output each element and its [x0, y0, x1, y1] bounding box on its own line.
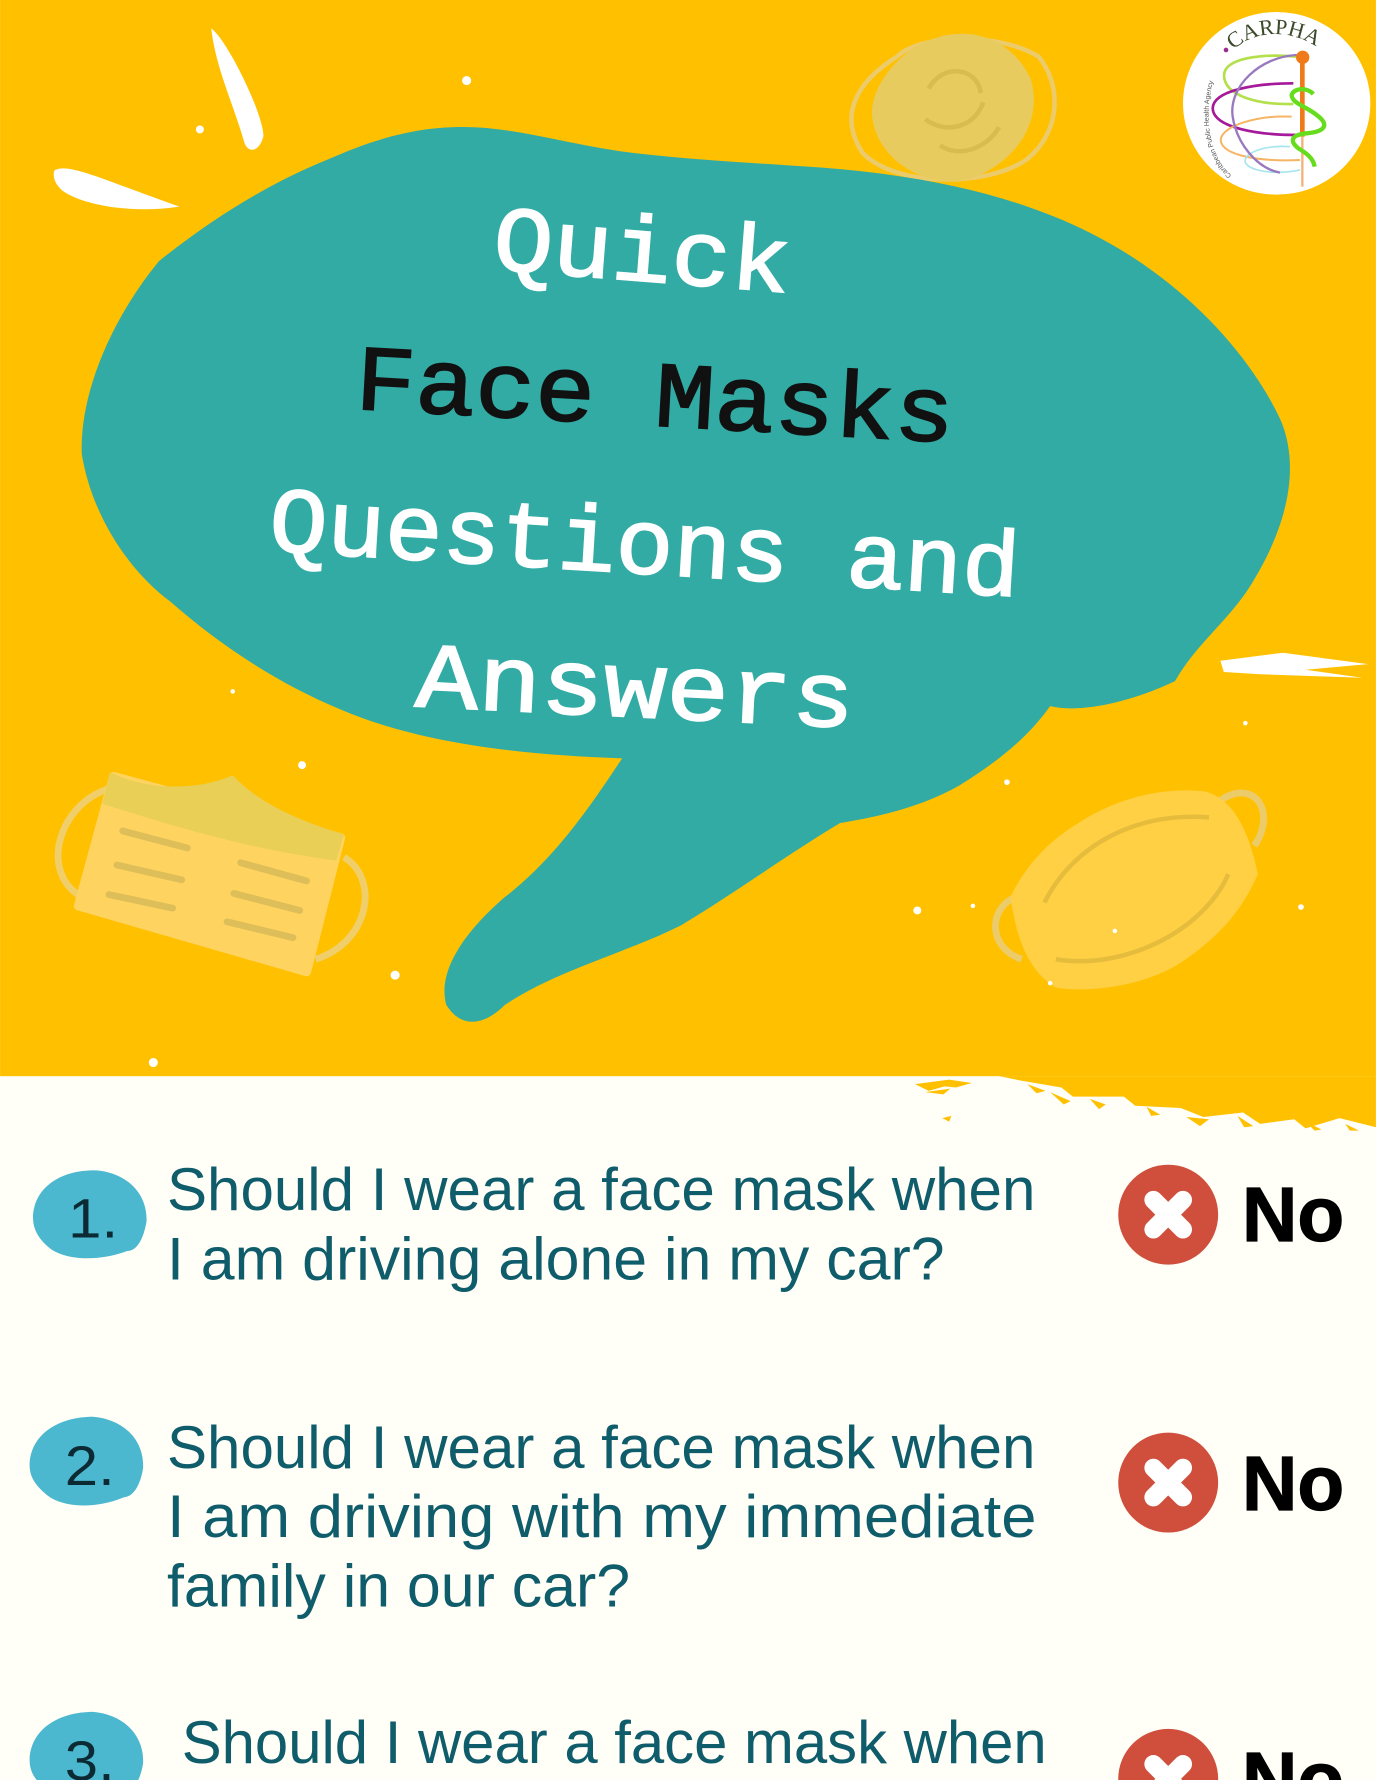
- question text 3: Should I wear a face mask when: [182, 1709, 1047, 1776]
- CARPHA logo: CARPHA: [1228, 20, 1317, 47]
- title: Answers: [413, 629, 857, 756]
- number badge 2: [30, 1417, 143, 1505]
- title: Face Masks: [353, 332, 957, 470]
- title: Quick: [489, 192, 794, 320]
- speech bubble: [82, 127, 1290, 1022]
- question text 2: I am driving with my immediate: [167, 1483, 1037, 1550]
- answer 1: No: [1242, 1172, 1344, 1258]
- question 1: [33, 1156, 1344, 1292]
- question text 1: I am driving alone in my car?: [167, 1225, 945, 1292]
- icon: rectangular mask: [58, 772, 365, 972]
- answer 1: [1118, 1165, 1344, 1265]
- CARPHA logo: Caribbean Public Health Agency: [1204, 80, 1230, 178]
- number badge 1: [33, 1170, 147, 1258]
- answer 2: No: [1242, 1441, 1344, 1527]
- icon: oval mask: [995, 790, 1264, 989]
- title: [266, 192, 1023, 756]
- brush edge: [915, 1065, 1376, 1131]
- number badge 3: [30, 1712, 143, 1780]
- number badge 2: 2.: [65, 1435, 115, 1497]
- icon: round mask: [851, 34, 1055, 182]
- answer 3: [1118, 1729, 1344, 1780]
- number badge 1: 1.: [68, 1187, 118, 1249]
- question 3: [30, 1709, 1344, 1780]
- CARPHA logo: [1183, 12, 1370, 195]
- question text 1: [167, 1156, 1035, 1292]
- question text 2: [167, 1414, 1037, 1619]
- question text 2: family in our car?: [167, 1552, 630, 1619]
- answer 2: [1118, 1433, 1344, 1533]
- question text 2: Should I wear a face mask when: [167, 1414, 1035, 1481]
- title: Questions and: [266, 474, 1023, 624]
- question 2: [30, 1414, 1344, 1619]
- question text 1: Should I wear a face mask when: [167, 1156, 1035, 1223]
- white brush marks and specks: [54, 28, 1368, 1067]
- header panel: [0, 0, 1376, 1131]
